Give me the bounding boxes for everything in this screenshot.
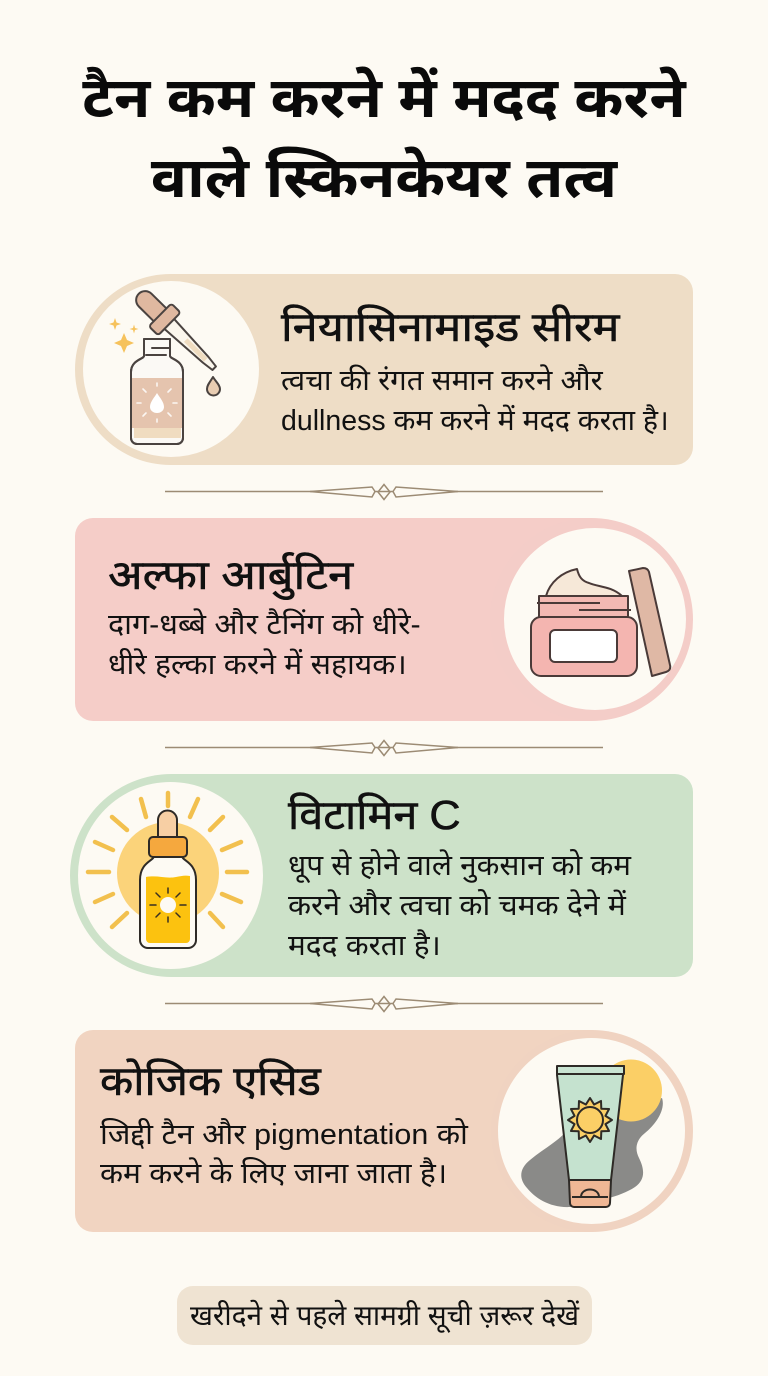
title: वाले स्किनकेयर तत्व (151, 146, 617, 209)
text: alpha arbutin description: धीरे हल्का करने में सहायक। (108, 649, 407, 681)
heading: kojic acid: कोजिक एसिड (100, 1058, 321, 1104)
heading: alpha arbutin: अल्फा आर्बुटिन (108, 552, 353, 598)
heading: vitamin C: विटामिन C (288, 792, 461, 838)
panel: vitamin C (70, 774, 693, 977)
text: kojic acid description: कम करने के लिए जाना जाता है। (100, 1158, 447, 1190)
title: टैन कम करने में मदद करने (82, 66, 686, 129)
callout: check ingredients list: खरीदने से पहले सामग्री सूची ज़रूर देखें (190, 1300, 579, 1331)
text: vitamin C description: मदद करता है। (288, 930, 441, 962)
panel: niacinamide serum (75, 274, 693, 465)
text: kojic acid description (100, 1118, 468, 1190)
title (82, 66, 687, 209)
text: niacinamide description: dullness कम करने में मदद करता है। (281, 405, 669, 437)
text: vitamin C description: करने और त्वचा को चमक देने में (288, 890, 626, 922)
text: vitamin C description: धूप से होने वाले नुकसान को कम (288, 850, 631, 882)
text: niacinamide description: त्वचा की रंगत समान करने और (281, 365, 603, 397)
heading: niacinamide serum: नियासिनामाइड सीरम (281, 304, 619, 350)
text: alpha arbutin description: दाग-धब्बे और टैनिंग को धीरे- (108, 609, 421, 641)
text: vitamin C description (288, 849, 632, 962)
text: niacinamide description (281, 364, 669, 437)
panel: alpha arbutin (75, 518, 693, 721)
panel: kojic acid (75, 1030, 693, 1232)
text: kojic acid description: जिद्दी टैन और pigmentation को (100, 1119, 468, 1151)
text: alpha arbutin description (108, 608, 421, 681)
callout: check ingredients list (177, 1286, 592, 1345)
